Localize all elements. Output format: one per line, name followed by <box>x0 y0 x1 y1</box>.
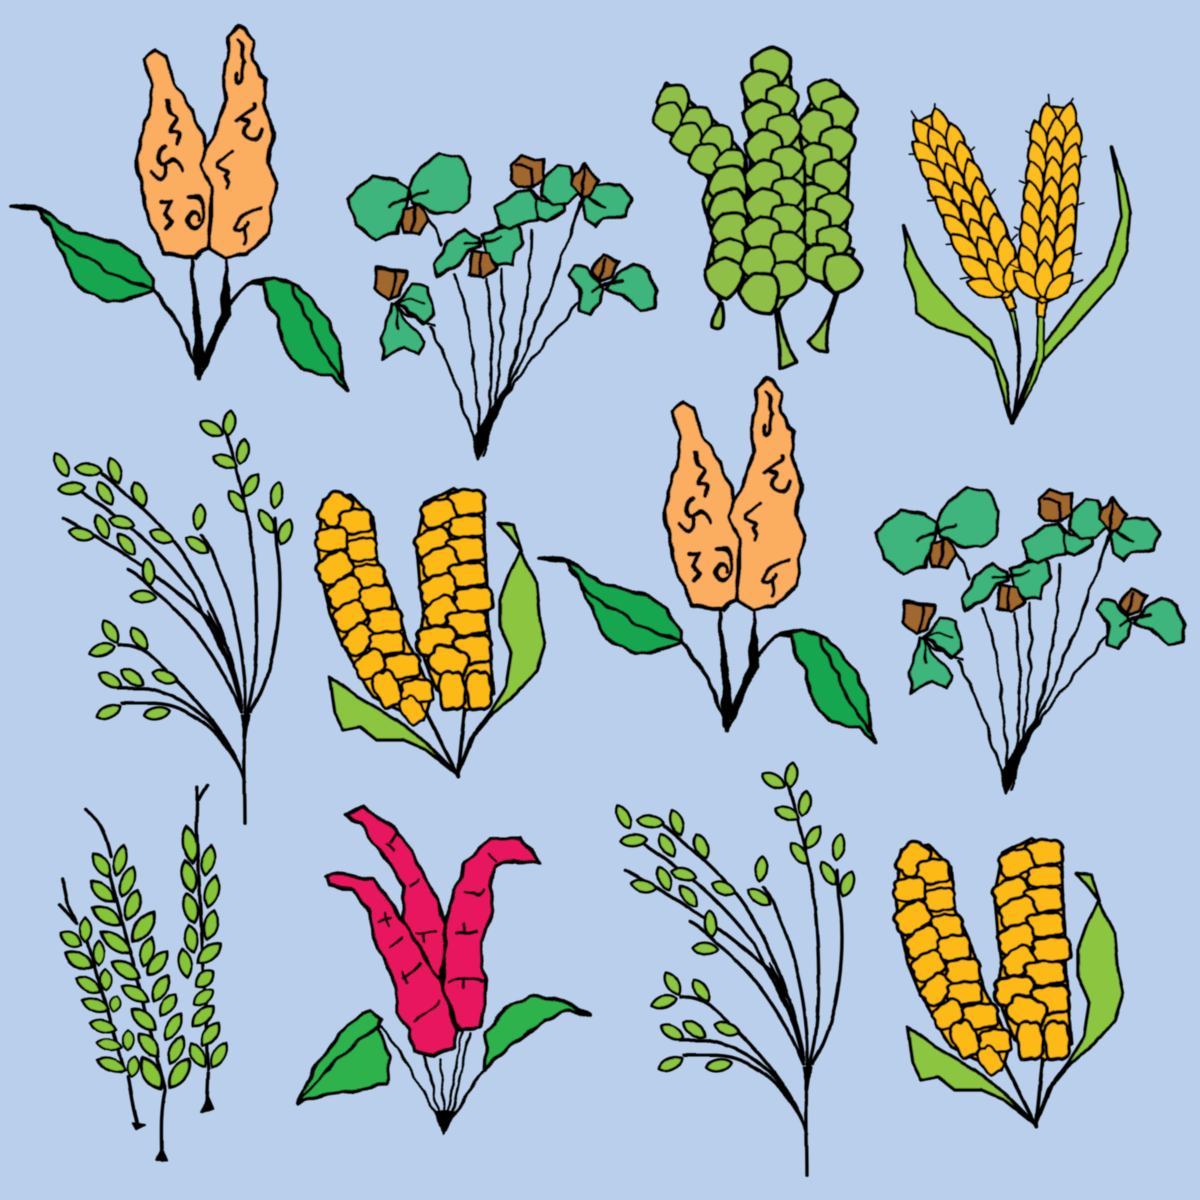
plant: orange sorghum, top left <box>10 27 347 390</box>
plant: yellow ragged grain, middle centre <box>312 487 545 777</box>
plant: teal clover sprig, top centre <box>348 153 657 460</box>
plant: slim green wheat, bottom left <box>57 785 231 1160</box>
plant: millet sprig, bottom centre <box>612 762 857 1175</box>
plant: green wheat sheaf, top right centre <box>648 47 866 368</box>
plant: golden wheat, top right <box>890 91 1130 423</box>
plant: yellow ragged grain, bottom right <box>890 837 1123 1127</box>
plant: teal clover sprig, middle far right <box>876 487 1185 794</box>
plant: millet sprig, middle left <box>50 410 295 823</box>
plant: orange sorghum, middle right <box>538 379 875 742</box>
plant: crimson amaranth, bottom centre <box>297 808 590 1135</box>
